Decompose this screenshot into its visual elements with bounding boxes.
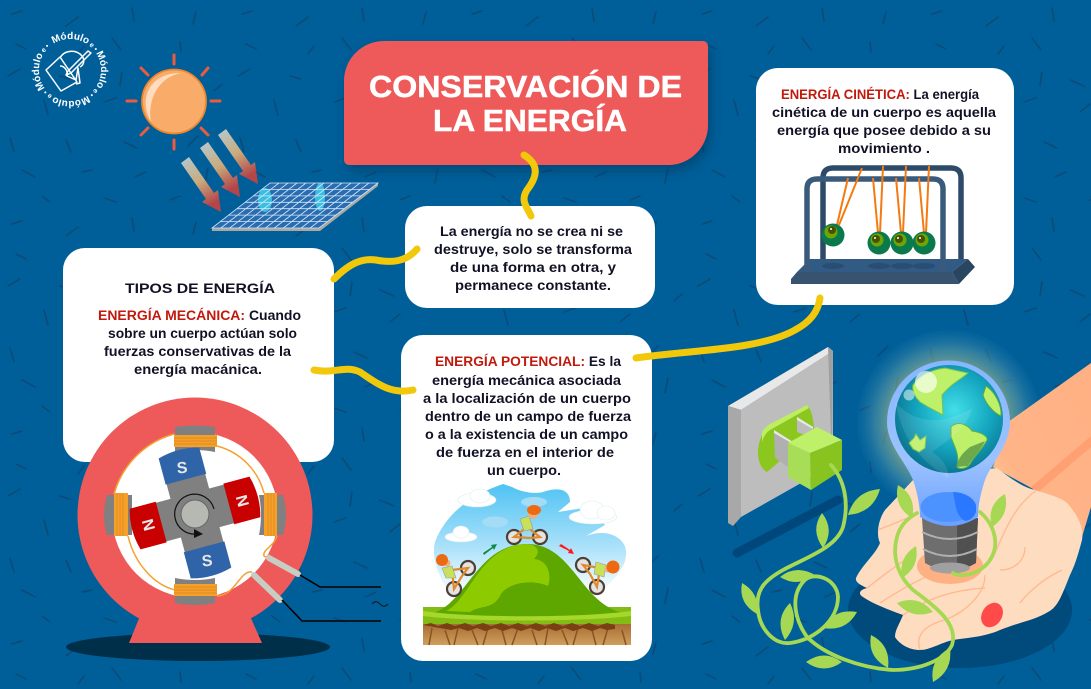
text: definición	[434, 224, 633, 293]
connector: potencial to cinética	[636, 298, 820, 358]
title: LA ENERGÍA	[433, 103, 627, 138]
icon: newton's cradle	[791, 166, 975, 284]
illustration: wall socket and plug	[728, 347, 842, 553]
text: energía potencial: ENERGÍA POTENCIAL: Es la	[435, 354, 621, 369]
rotor	[115, 433, 275, 593]
logo: Módulo e: Módulo e • Módulo e • Módulo e • Módulo e •	[32, 32, 108, 108]
text: energía cinética: cinética de un cuerpo es aquella	[772, 105, 997, 120]
text: definición: permanece constante.	[455, 278, 611, 293]
title banner	[344, 41, 708, 165]
panel: energía potencial	[401, 335, 652, 661]
text: energía potencial: dentro de un campo de fuerza	[425, 409, 632, 424]
title: CONSERVACIÓN DE	[369, 68, 682, 104]
heading: tipos de energía: TIPOS DE ENERGÍA	[125, 281, 275, 296]
text: energía mecánica	[98, 308, 301, 377]
text: energía mecánica: energía macánica.	[134, 362, 262, 377]
text: energía potencial: energía mecánica asociada	[432, 373, 622, 388]
leaves	[741, 485, 1006, 682]
text: energía potencial: de fuerza en el interior de	[436, 445, 615, 460]
hub	[175, 494, 214, 538]
text: energía cinética: energía que posee debido a su	[777, 123, 991, 138]
illustration: electric motor	[66, 398, 388, 661]
pole letters: N	[140, 517, 159, 532]
text: energía cinética	[772, 87, 997, 156]
text: energía mecánica: fuerzas conservativas de la	[104, 344, 292, 359]
text: definición: La energía no se crea ni se	[440, 224, 624, 239]
text: energía mecánica: ENERGÍA MECÁNICA: Cuando	[98, 308, 301, 323]
connector: tipos to potencial	[314, 369, 413, 391]
illustration: vine cable	[741, 465, 1006, 682]
text: energía cinética: movimiento .	[838, 141, 930, 156]
text: definición: de una forma en otra, y	[450, 260, 617, 275]
text: energía cinética: ENERGÍA CINÉTICA: La energía	[781, 87, 979, 102]
illustration: bulb glow	[857, 330, 1041, 514]
text: energía potencial: o a la existencia de un campo	[425, 427, 628, 442]
connector: title to definition	[524, 155, 535, 216]
icon: sunlight arrows	[181, 129, 258, 212]
text: definición: destruye, solo se transforma	[434, 242, 633, 257]
illustration: earth light bulb	[887, 360, 1010, 584]
illustration: hands	[848, 363, 1091, 668]
biker top	[507, 505, 547, 544]
arrows	[483, 544, 574, 555]
text: energía mecánica: sobre un cuerpo actúan solo	[108, 326, 297, 341]
plug	[788, 427, 842, 490]
panel: definición	[405, 206, 655, 308]
illustration: bikers on hill	[423, 484, 631, 645]
pole letters: N	[234, 493, 253, 508]
balls	[822, 224, 936, 254]
stators and coils	[104, 426, 286, 605]
pole letters: S	[176, 460, 189, 477]
globe	[895, 365, 1003, 473]
terminals and wires	[254, 558, 388, 621]
bulb screw base	[922, 518, 978, 574]
icon: sun	[127, 55, 220, 149]
icon: solar panel	[212, 183, 378, 231]
biker right	[576, 558, 620, 594]
pole letters	[140, 460, 253, 570]
panel: tipos de energía	[63, 248, 334, 462]
pole letters: S	[201, 553, 214, 570]
text: energía potencial: un cuerpo.	[487, 463, 561, 478]
title	[369, 68, 682, 138]
connector: definition to tipos	[334, 249, 417, 279]
text: energía potencial	[423, 354, 632, 478]
biker left	[436, 554, 475, 596]
text: energía potencial: a la localización de un cuerpo	[423, 391, 631, 406]
